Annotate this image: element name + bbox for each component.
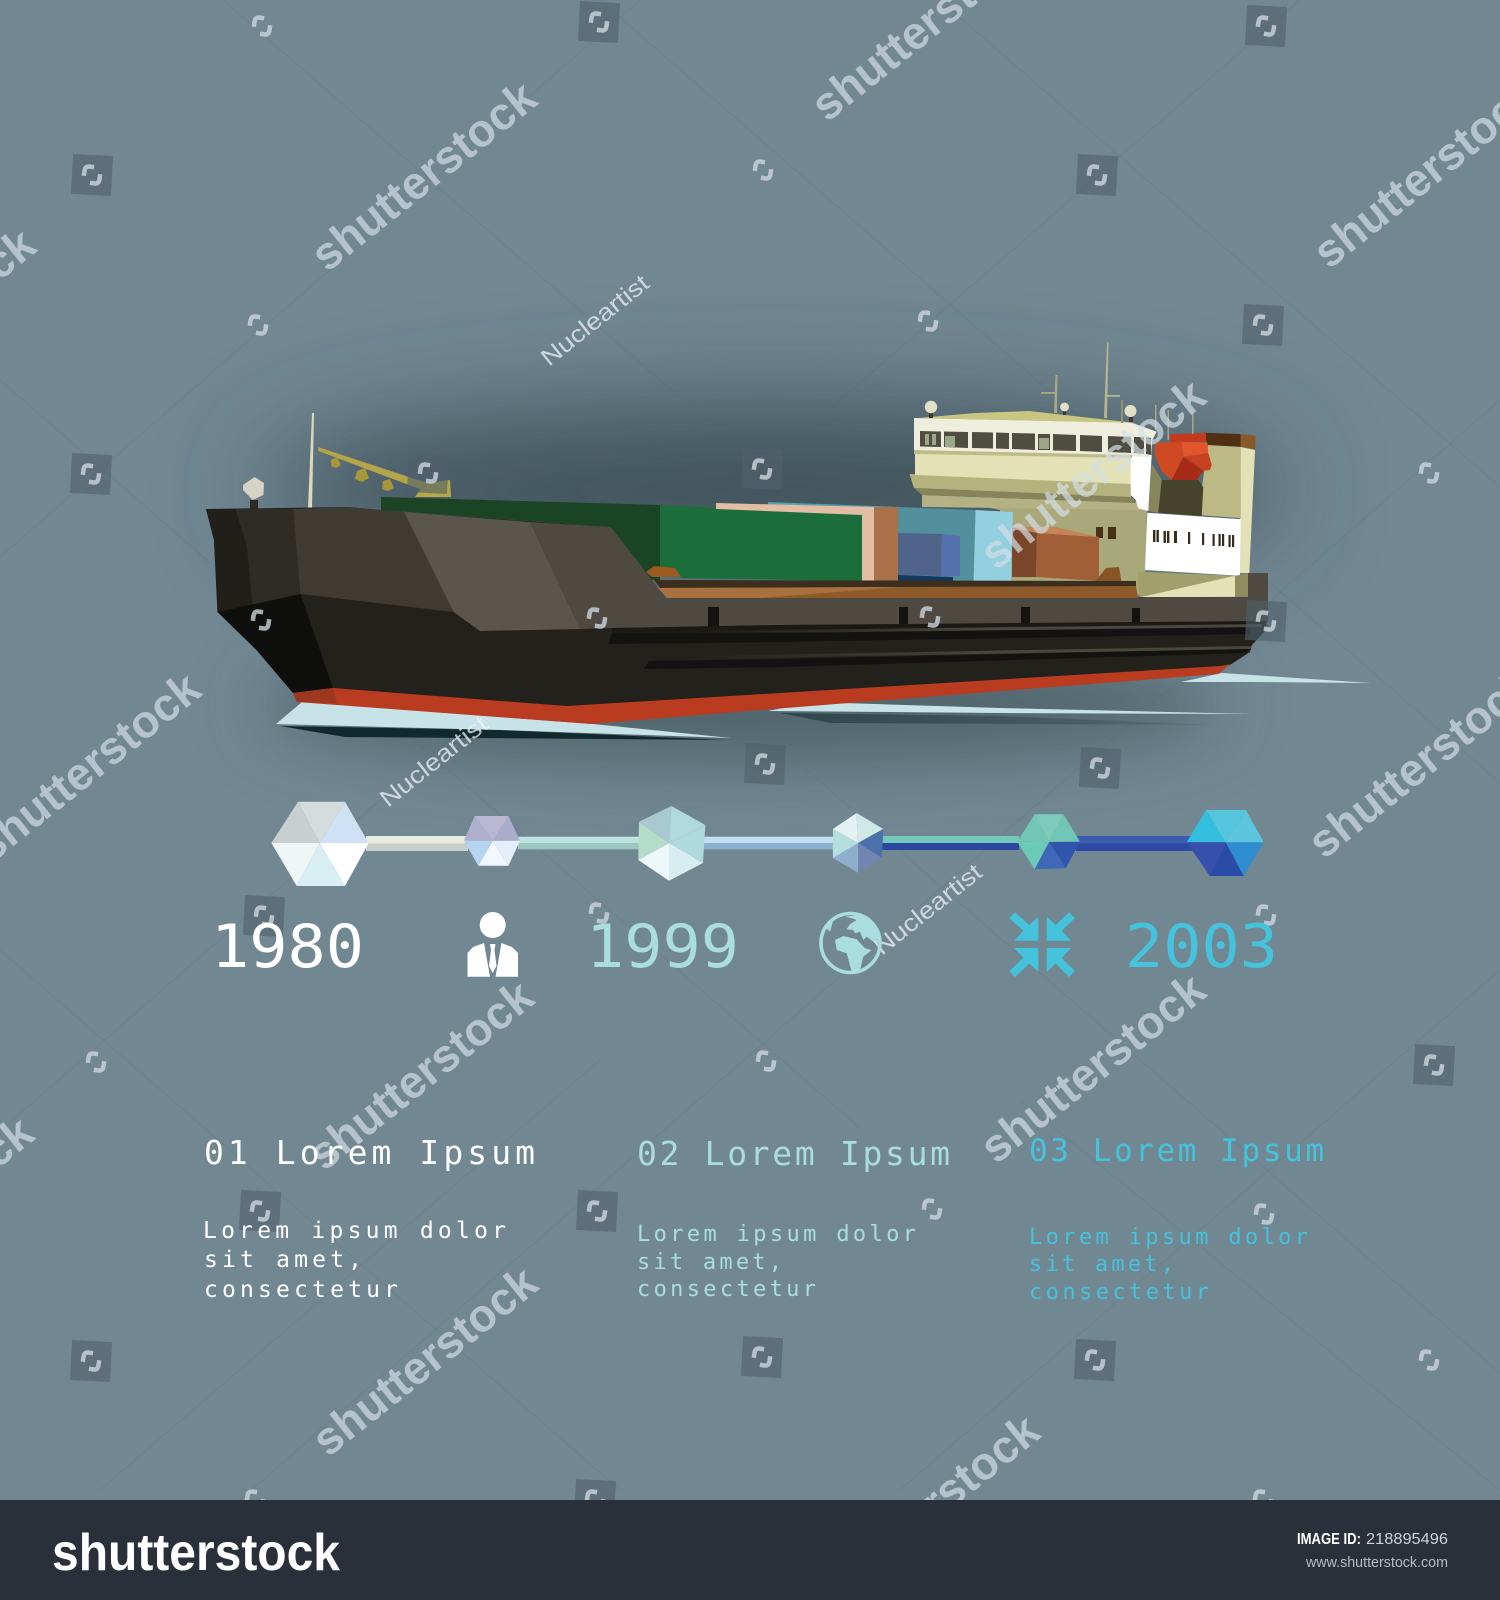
text block 02: sit amet,: [637, 1250, 782, 1275]
footer image id: IMAGE ID:: [1297, 1531, 1361, 1548]
timeline connector bars: [366, 836, 1192, 851]
cargo ship illustration: [206, 342, 1371, 740]
watermarks: shutterstock: [970, 962, 1215, 1173]
footer url: www.shutterstock.com: [1305, 1554, 1448, 1571]
rear tower: [1198, 433, 1256, 573]
text block 03: consectetur: [1029, 1280, 1209, 1305]
watermarks: shutterstock: [302, 1255, 547, 1466]
text block 03: Lorem ipsum dolor: [1029, 1225, 1308, 1250]
year 1980: 1980: [211, 912, 364, 982]
footer image id: 218895496: [1366, 1531, 1448, 1548]
text block 03: 03 Lorem Ipsum: [1029, 1133, 1324, 1169]
text block 01: Lorem ipsum dolor: [203, 1218, 506, 1244]
watermarks: Nucleartist: [869, 858, 988, 961]
text block 02: consectetur: [637, 1277, 816, 1302]
white deckhouse with portholes: [1145, 513, 1241, 576]
icon: businessman: [468, 912, 518, 977]
text block 02: 02 Lorem Ipsum: [637, 1134, 950, 1173]
text block 01: 01 Lorem Ipsum: [204, 1133, 535, 1172]
timeline: [271, 802, 1264, 886]
text block 03: sit amet,: [1029, 1252, 1174, 1277]
year 1999: 1999: [586, 912, 739, 982]
text block 02: [637, 1134, 950, 1302]
watermarks: shutterstock: [970, 368, 1215, 579]
hull: [206, 507, 1268, 724]
icon: globe: [821, 914, 880, 972]
timeline node 4: [833, 813, 883, 873]
watermarks: Nucleartist: [536, 269, 655, 372]
bridge: [910, 411, 1157, 511]
hull stanchions: [708, 607, 1140, 628]
timeline node 2: [464, 816, 520, 866]
text block 01: [203, 1133, 535, 1303]
ship shadow: [260, 405, 1280, 760]
text block 01: consectetur: [204, 1277, 398, 1303]
antennas and lights: [925, 342, 1194, 440]
superstructure: [910, 342, 1256, 597]
timeline node 3: [638, 806, 705, 881]
lifeboat: [1154, 433, 1212, 480]
footer logo: shutterstock: [52, 1524, 340, 1582]
text block 02: Lorem ipsum dolor: [637, 1222, 916, 1247]
deck crane: [318, 447, 451, 497]
timeline node 1: [271, 802, 369, 886]
red waterline: [293, 664, 1230, 724]
cargo containers: [381, 497, 1122, 585]
watermarks: shutterstock: [301, 70, 546, 281]
watermarks: Nucleartist: [375, 710, 494, 813]
text block 01: sit amet,: [204, 1247, 362, 1273]
text block 03: [1029, 1133, 1324, 1305]
foam wakes: [276, 673, 1371, 740]
hull strakes: [608, 621, 1266, 669]
deck planks: [646, 566, 1138, 598]
icon: compress arrows: [1009, 912, 1075, 977]
timeline node 6: [1187, 810, 1264, 876]
year 2003: 2003: [1125, 912, 1278, 982]
watermarks: shutterstock: [298, 969, 543, 1180]
footer bar: [0, 1500, 1500, 1600]
timeline node 5: [1017, 814, 1080, 869]
mast and bow light: [243, 413, 314, 509]
